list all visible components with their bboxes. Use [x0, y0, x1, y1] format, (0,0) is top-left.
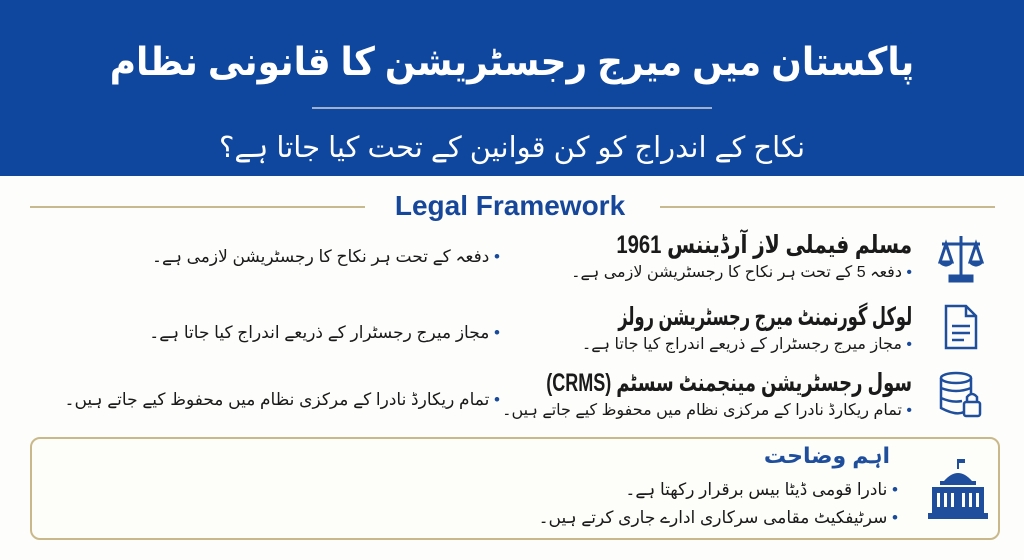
item 2: local govt rules: • مجاز میرج رجسٹرار کے ذریعے اندراج کیا جاتا ہے۔: [582, 336, 912, 353]
note bullets: • نادرا قومی ڈیٹا بیس برقرار رکھتا ہے۔: [625, 480, 898, 499]
item 1: MFLO: [571, 229, 984, 282]
item 1: MFLO: مسلم فیملی لاز آرڈیننس 1961: [616, 231, 912, 259]
title: پاکستان میں میرج رجسٹریشن کا قانونی نظام: [110, 41, 914, 84]
left column bullets: • دفعہ کے تحت ہر نکاح کا رجسٹریشن لازمی ہے۔: [152, 247, 500, 266]
subtitle: نکاح کے اندراج کو کن قوانین کے تحت کیا جاتا ہے؟: [219, 132, 805, 164]
left column bullets: • مجاز میرج رجسٹرار کے ذریعے اندراج کیا جاتا ہے۔: [149, 323, 500, 342]
icon: scales: [938, 236, 984, 282]
item 3: CRMS: • تمام ریکارڈ نادرا کے مرکزی نظام میں محفوظ کیے جاتے ہیں۔: [502, 402, 912, 419]
item 3: CRMS: [502, 369, 982, 419]
header band: [0, 0, 1024, 176]
item 3: CRMS: سول رجسٹریشن مینجمنٹ سسٹم (CRMS): [546, 369, 912, 397]
left column bullets: [64, 247, 500, 409]
icon: database lock: [940, 372, 982, 418]
note box: • سرٹیفکیٹ مقامی سرکاری ادارے جاری کرتے ہیں۔: [539, 508, 898, 527]
icon: document: [944, 304, 978, 350]
item 1: MFLO: • دفعہ 5 کے تحت ہر نکاح کا رجسٹریشن لازمی ہے۔: [571, 264, 912, 281]
icon: government building: [928, 459, 988, 519]
note heading: اہم وضاحت: [764, 443, 890, 468]
item 2: local govt rules: [582, 302, 978, 353]
note box: [30, 437, 1000, 540]
left column bullets: • تمام ریکارڈ نادرا کے مرکزی نظام میں محفوظ کیے جاتے ہیں۔: [64, 390, 500, 409]
item 2: local govt rules: لوکل گورنمنٹ میرج رجسٹریشن رولز: [618, 303, 912, 331]
section heading: Legal Framework: [395, 190, 625, 221]
